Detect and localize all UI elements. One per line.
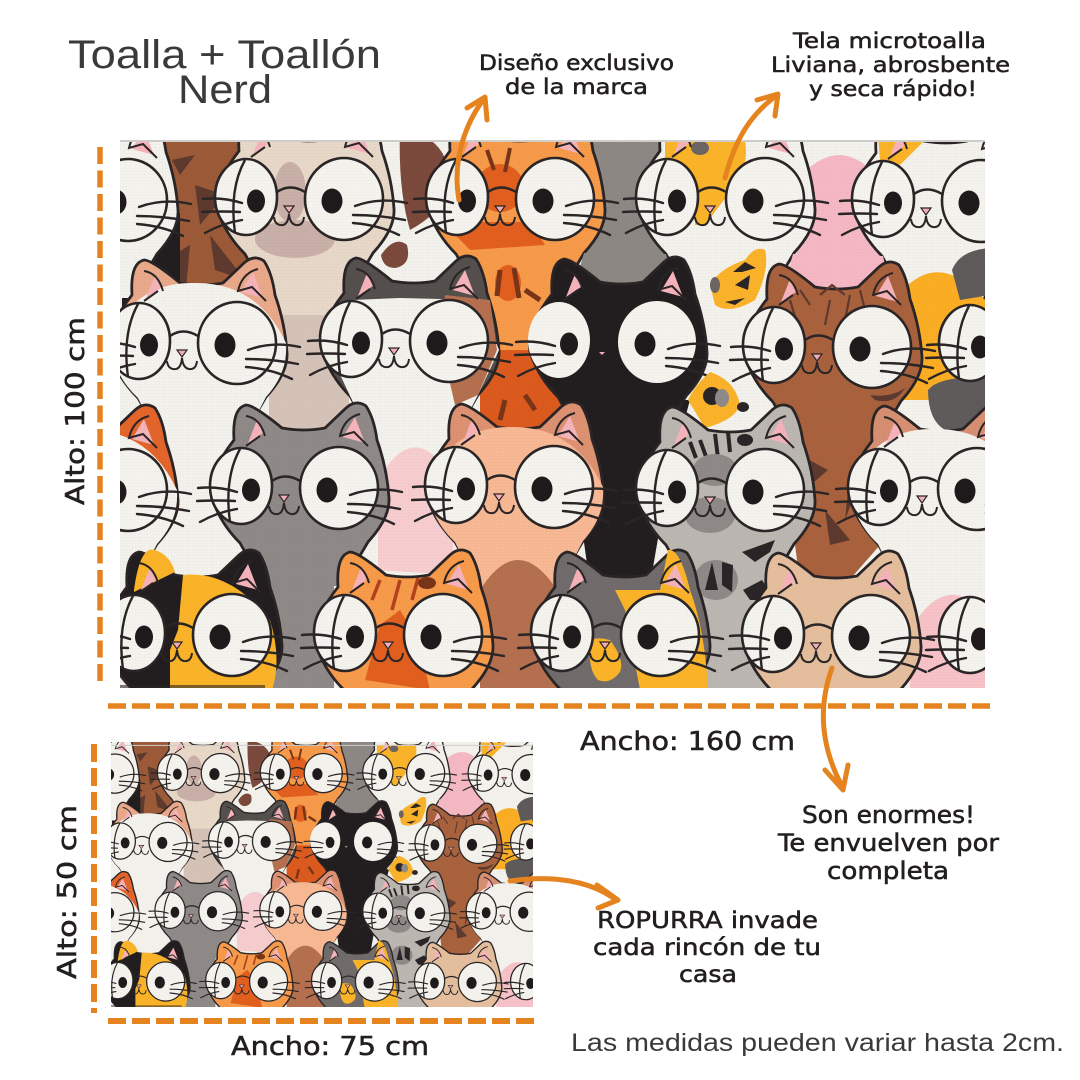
dimension line: large towel width bbox=[108, 703, 990, 709]
label: small towel width: Ancho: 75 cm bbox=[231, 1032, 429, 1062]
cat: row 4 calico bbox=[90, 550, 295, 733]
arrow: to fabric note bbox=[725, 94, 778, 178]
pink shape below row 1 bbox=[780, 254, 893, 300]
label: small towel height: Alto: 50 cm bbox=[53, 805, 83, 979]
note: exclusive design: Diseño exclusivo bbox=[479, 51, 674, 75]
spotted yellow blob upper bbox=[710, 249, 766, 309]
note: fabric: Tela microtoalla bbox=[792, 29, 986, 53]
cat: row 2 brown bbox=[730, 262, 935, 585]
cat: row 2 white bbox=[95, 258, 300, 443]
note: brand: ROPURRA invade bbox=[597, 908, 818, 934]
note: size: Son enormes! bbox=[802, 801, 975, 829]
cat: row 2 dark tabby bbox=[307, 256, 512, 441]
cat: row 1 left, white and black bbox=[0, 115, 191, 343]
note: size: completa bbox=[827, 857, 949, 885]
cat: row 3 peach bbox=[412, 402, 617, 587]
dimension line: small towel width bbox=[108, 1018, 534, 1024]
note: exclusive design bbox=[479, 51, 674, 99]
dimension line: large towel height bbox=[97, 147, 103, 686]
cat: row 3 grey bbox=[197, 403, 402, 695]
note: brand: casa bbox=[679, 962, 737, 988]
cat: row 4 right, lens only bbox=[926, 596, 1080, 678]
cat: row 1 white with yellow ear bbox=[839, 116, 1044, 299]
panel: large towel bbox=[120, 140, 985, 688]
note: brand: cada rincón de tu bbox=[593, 935, 821, 961]
brown dome under peach cat bbox=[480, 560, 557, 690]
cat: row 3 grey tabby bbox=[623, 405, 828, 695]
cat: row 4 beige bbox=[729, 551, 934, 734]
title: Nerd bbox=[178, 68, 272, 112]
cat: row 2 right, lens only bbox=[926, 304, 1080, 386]
arrow: to size note bbox=[823, 668, 848, 790]
note: fabric: Liviana, abrosbente bbox=[771, 53, 1010, 77]
note: size: Te envuelven por bbox=[777, 829, 999, 857]
grey blobs right bbox=[928, 248, 990, 430]
title: Toalla + Toallón bbox=[68, 33, 381, 77]
cat: row 1 beige bbox=[202, 114, 407, 440]
note: fabric: y seca rápido! bbox=[809, 77, 977, 101]
note: size bbox=[777, 801, 999, 885]
dimension line: small towel height bbox=[91, 744, 97, 1013]
label: large towel height: Alto: 100 cm bbox=[61, 317, 91, 505]
note: brand bbox=[593, 908, 821, 988]
title bbox=[68, 33, 381, 112]
arrow: to exclusive design note bbox=[457, 97, 487, 200]
cat: row 4 grey and yellow bbox=[518, 550, 723, 733]
cat: row 4 orange bbox=[301, 550, 506, 733]
grey column above black cat bbox=[570, 253, 680, 300]
panel: small towel bbox=[111, 742, 533, 1007]
cat: row 1 orange bbox=[413, 114, 618, 450]
footnote: Las medidas pueden variar hasta 2cm. bbox=[571, 1029, 1064, 1057]
yellow dome right bbox=[903, 272, 985, 400]
cat: row 1 white with yellow spots bbox=[623, 114, 828, 297]
cat: row 2 black bbox=[515, 257, 720, 585]
spotted yellow blob lower bbox=[688, 372, 749, 428]
note: exclusive design: de la marca bbox=[505, 75, 648, 99]
note: fabric bbox=[771, 29, 1010, 101]
arrow: to small towel note bbox=[510, 879, 618, 908]
cat: row 3 left, orange ears bbox=[0, 405, 191, 590]
label: large towel width: Ancho: 160 cm bbox=[580, 727, 795, 757]
cat: row 3 white bbox=[835, 404, 1040, 589]
